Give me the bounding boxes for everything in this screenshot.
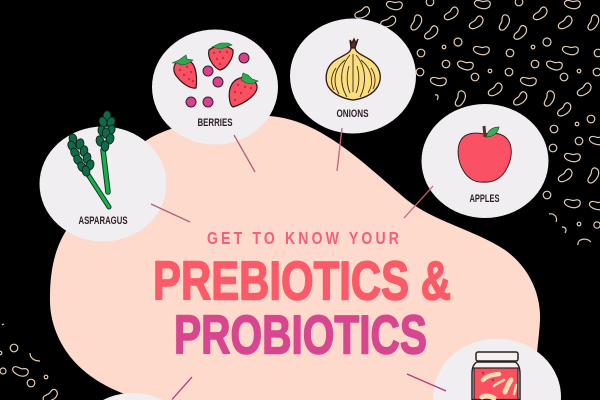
label: asparagus: ASPARAGUS — [78, 215, 128, 227]
connector: bottom left — [172, 377, 192, 400]
icon: berries — [172, 43, 258, 107]
pink blob background — [50, 115, 540, 400]
connector: onions — [337, 128, 342, 171]
label: onions: ONIONS — [336, 108, 368, 120]
strawberry: right — [229, 73, 258, 107]
connector: jar — [407, 374, 446, 391]
strawberry: left — [172, 55, 197, 88]
strawberry: top — [209, 43, 233, 70]
label: berries: BERRIES — [198, 117, 232, 129]
heading: get to know your: GET TO KNOW YOUR — [207, 228, 399, 248]
icon: jar of fermented food — [472, 352, 520, 400]
title line: prebiotics: PREBIOTICS & — [153, 250, 451, 312]
connector: berries — [234, 135, 255, 172]
icon: onion — [326, 39, 380, 100]
circle: asparagus — [40, 110, 166, 242]
circle: bottom left, cropped by frame — [103, 393, 163, 400]
circle: jar, cropped by frame — [433, 339, 561, 400]
circle: onions — [290, 18, 416, 134]
title line: probiotics: PROBIOTICS — [174, 304, 427, 366]
circle: berries — [152, 30, 278, 144]
icon: apple — [458, 126, 511, 182]
icon: asparagus — [66, 110, 117, 207]
pattern: beans top right — [353, 0, 600, 245]
connector: apples — [404, 186, 433, 218]
circle: apples — [422, 104, 548, 218]
connector: asparagus — [151, 204, 190, 222]
pattern: beans bottom left — [0, 324, 59, 400]
label: apples: APPLES — [470, 193, 500, 205]
